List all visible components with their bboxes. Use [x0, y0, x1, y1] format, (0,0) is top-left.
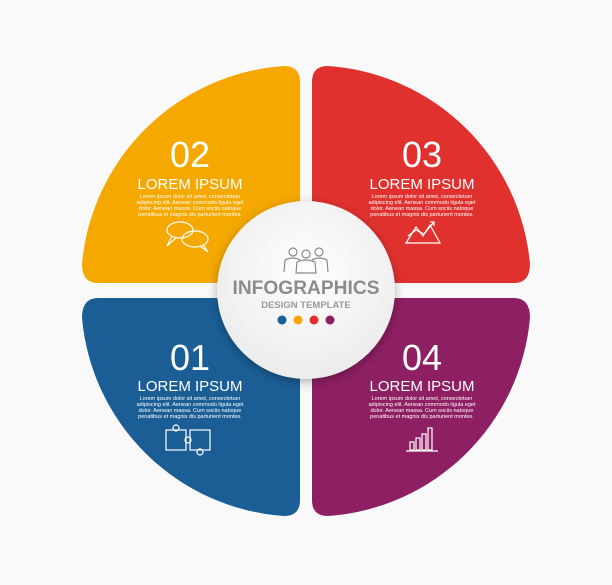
- body 03: penatibus et magnis dis parturient montes.: [370, 212, 474, 218]
- body 02: [136, 194, 244, 218]
- number 03: 03: [402, 134, 442, 175]
- body 01: [136, 396, 244, 420]
- body 02: penatibus et magnis dis parturient montes.: [138, 212, 242, 218]
- body 03: adipiscing elit. Aenean commodo ligula eget: [368, 200, 476, 206]
- number 01: 01: [170, 337, 210, 378]
- center circle: [217, 201, 395, 379]
- heading 01: LOREM IPSUM: [137, 378, 243, 395]
- panel: 03 red: [312, 66, 530, 283]
- body 02: dolor. Aenean massa. Cum sociis natoque: [139, 206, 241, 212]
- heading 04: LOREM IPSUM: [369, 378, 475, 395]
- title: INFOGRAPHICS: [232, 278, 380, 299]
- body 03: dolor. Aenean massa. Cum sociis natoque: [371, 206, 473, 212]
- heading 02: LOREM IPSUM: [137, 176, 243, 193]
- body 01: adipiscing elit. Aenean commodo ligula eget: [136, 402, 244, 408]
- body 01: dolor. Aenean massa. Cum sociis natoque: [139, 408, 241, 414]
- icon: speech bubbles: [167, 222, 208, 252]
- body 03: Lorem ipsum dolor sit amet, consectetuer: [372, 194, 473, 200]
- heading 03: LOREM IPSUM: [369, 176, 475, 193]
- body 04: dolor. Aenean massa. Cum sociis natoque: [371, 408, 473, 414]
- body 02: adipiscing elit. Aenean commodo ligula eget: [136, 200, 244, 206]
- body 04: adipiscing elit. Aenean commodo ligula eget: [368, 402, 476, 408]
- body 04: penatibus et magnis dis parturient montes.: [370, 414, 474, 420]
- panel: 01 blue: [82, 298, 300, 516]
- color dots: [278, 316, 334, 324]
- body 02: Lorem ipsum dolor sit amet, consectetuer: [140, 194, 241, 200]
- number 02: 02: [170, 134, 210, 175]
- icon: people: [284, 248, 328, 273]
- body 01: Lorem ipsum dolor sit amet, consectetuer: [140, 396, 241, 402]
- body 04: [368, 396, 476, 420]
- body 03: [368, 194, 476, 218]
- icon: puzzle: [166, 425, 210, 455]
- body 04: Lorem ipsum dolor sit amet, consectetuer: [372, 396, 473, 402]
- icon: bar chart: [406, 428, 438, 451]
- number 04: 04: [402, 337, 442, 378]
- panel: 04 purple: [312, 298, 530, 516]
- panel: 02 yellow: [82, 66, 300, 283]
- icon: mountain chart: [406, 222, 440, 243]
- body 01: penatibus et magnis dis parturient montes.: [138, 414, 242, 420]
- subtitle: DESIGN TEMPLATE: [261, 300, 351, 311]
